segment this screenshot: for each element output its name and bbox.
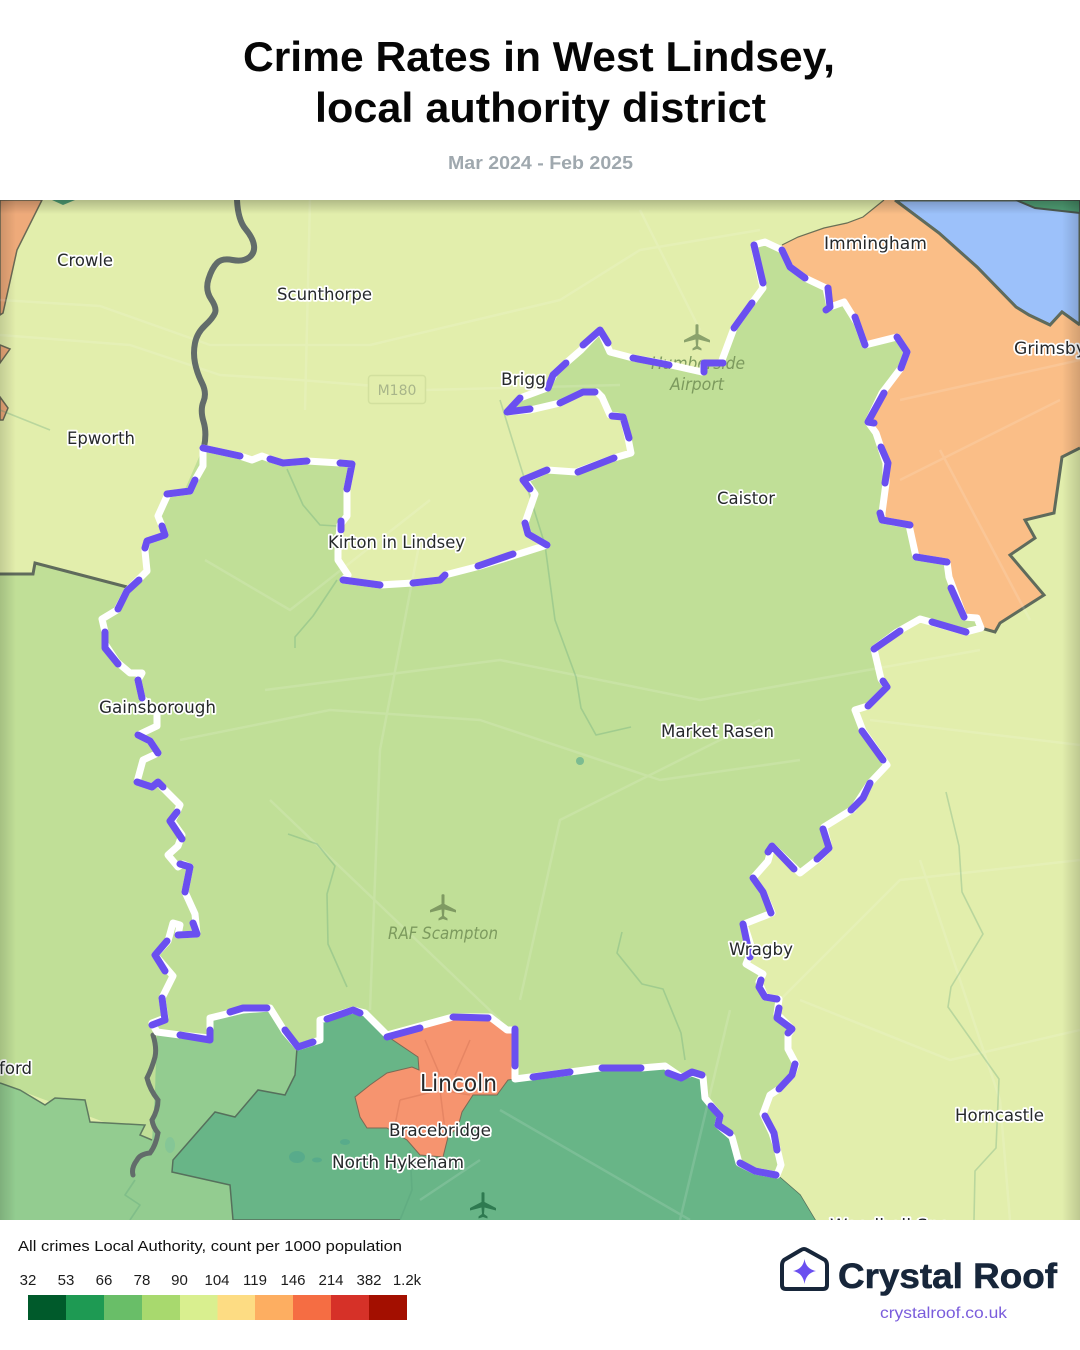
icon: house outline	[782, 1249, 827, 1289]
place labels: Kirton in Lindsey	[328, 533, 465, 553]
motorway shield M180: M180	[378, 383, 416, 399]
legend title: All crimes Local Authority, count per 1000 population	[18, 1238, 402, 1255]
brand logo	[782, 1249, 1057, 1322]
website url: crystalroof.co.uk	[880, 1305, 1008, 1322]
region: bassetlaw	[0, 448, 203, 1140]
map	[0, 200, 1080, 1236]
place labels	[0, 234, 1080, 1236]
place labels: Crowle	[57, 251, 113, 271]
region boundary: north-east upper edge	[782, 200, 884, 245]
place labels: Epworth	[67, 429, 135, 449]
legend tick labels: 53	[58, 1272, 74, 1289]
region: north east lincolnshire	[782, 200, 1080, 632]
region: newark and sherwood	[0, 1000, 297, 1220]
label: RAF Scampton: RAF Scampton	[388, 924, 498, 944]
place labels: Bracebridge	[389, 1121, 491, 1141]
motorway shield M180	[368, 376, 426, 404]
river trent south	[132, 1035, 158, 1175]
map edge shading	[0, 200, 1080, 1220]
place labels: Gainsborough	[99, 698, 216, 718]
region: east below boundary fill	[400, 1066, 815, 1220]
waterways	[0, 400, 999, 1220]
legend tick labels: 1.2k	[393, 1272, 422, 1289]
region: north-west orange	[0, 200, 42, 315]
region: sea	[895, 200, 1080, 325]
subtitle: date range: Mar 2024 - Feb 2025	[448, 153, 633, 173]
legend tick labels: 146	[280, 1272, 306, 1289]
label: Humberside Airport: Airport	[669, 375, 725, 395]
legend tick labels: 214	[318, 1272, 344, 1289]
lakes	[165, 757, 584, 1163]
title	[243, 33, 835, 131]
place labels: Caistor	[717, 489, 775, 509]
region: lincoln	[355, 1017, 515, 1157]
legend tick labels: 66	[96, 1272, 112, 1289]
title: local authority district	[315, 84, 766, 131]
icon: airport plane south	[470, 1192, 496, 1218]
legend tick labels: 32	[20, 1272, 36, 1289]
legend tick labels: 382	[356, 1272, 382, 1289]
label: Humberside Airport	[651, 354, 745, 395]
region boundary: bottom-left	[0, 1083, 152, 1140]
title: Crime Rates in West Lindsey,	[243, 33, 835, 80]
place labels: ford	[0, 1059, 32, 1079]
place labels: Immingham	[824, 234, 927, 254]
legend tick labels: 78	[134, 1272, 150, 1289]
place labels: Woodhall Spa	[830, 1216, 950, 1236]
legend tick labels: 90	[171, 1272, 188, 1289]
region: top green fragment	[52, 200, 75, 205]
wordmark: Crystal Roof	[838, 1257, 1057, 1296]
legend tick labels	[20, 1272, 422, 1289]
place labels: Wragby	[729, 940, 793, 960]
road network	[0, 200, 1080, 1220]
lincoln street network	[395, 1040, 470, 1130]
legend tick labels: 104	[204, 1272, 230, 1289]
region: west orange fragments	[0, 345, 10, 420]
place labels: Brigg	[501, 370, 546, 390]
boundary: purple dashes	[105, 245, 966, 1175]
place labels: Lincoln	[420, 1071, 497, 1097]
legend colour scale	[28, 1295, 407, 1320]
place labels: Market Rasen	[661, 722, 774, 742]
region boundary: north of bassetlaw	[0, 563, 127, 587]
region: north kesteven	[172, 1010, 815, 1220]
place labels: Scunthorpe	[277, 285, 372, 305]
legend tick labels: 119	[243, 1272, 267, 1289]
icon: airport plane RAF Scampton	[430, 894, 456, 920]
boundary: white outline	[102, 242, 981, 1175]
region: west lindsey	[102, 242, 981, 1175]
legend	[18, 1238, 422, 1320]
icon: airport plane Humberside	[684, 324, 710, 350]
region boundary: north east lincolnshire edge	[895, 200, 1080, 632]
river trent	[194, 200, 254, 447]
place labels: North Hykeham	[332, 1153, 464, 1173]
region: north-east top corner	[1016, 200, 1080, 213]
icon: purple sparkle	[793, 1259, 816, 1284]
map background	[0, 200, 1080, 1220]
label: Humberside Airport: Humberside	[651, 354, 745, 374]
place labels: Horncastle	[955, 1106, 1044, 1126]
